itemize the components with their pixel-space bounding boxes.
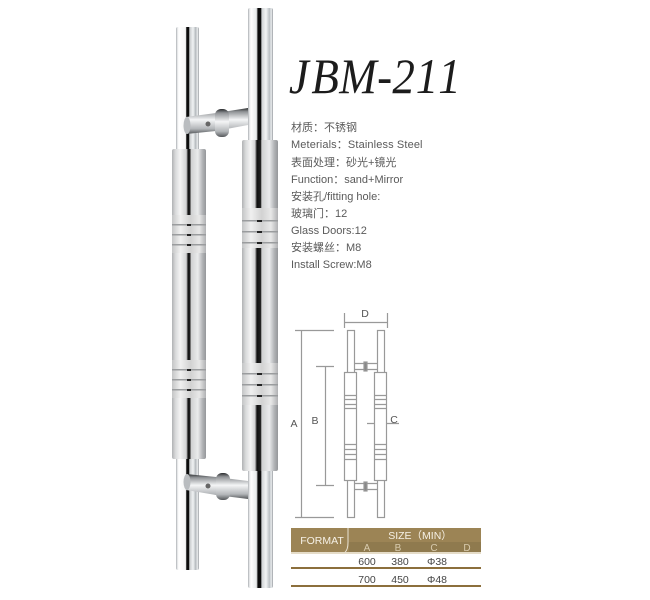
upper standoff arm [184,108,248,137]
table row 600: 600 [358,556,376,568]
dimension B [311,366,334,486]
table row 600: Φ38 [427,556,447,568]
lower standoff arm [184,473,248,500]
table row 700: 450 [391,574,409,586]
dimension A: A [290,418,298,430]
specification text block [291,120,423,271]
specification text block: Install Screw:M8 [291,259,372,271]
left sleeve [172,149,206,459]
dimension A [290,330,334,518]
title: JBM-211 [289,50,461,105]
specification text block: Function：sand+Mirror [291,174,404,186]
table header: C [430,543,438,554]
table header: D [463,543,471,554]
specification text block: Glass Doors:12 [291,225,367,237]
specification text block: 安装螺丝：M8 [291,240,361,254]
specification text block: 安装孔/fitting hole: [291,189,380,203]
icon: door handle photo [172,8,278,588]
right tube [248,8,273,588]
dimension B: B [311,415,319,427]
specification text block: 玻璃门：12 [291,206,347,220]
handle outline [344,330,387,518]
table row 700: 700 [358,574,376,586]
left tube [176,27,199,570]
size table [291,528,481,587]
table header: A [364,543,371,554]
dimension D: D [361,308,369,320]
table row 700 [291,574,481,587]
table header [291,528,481,554]
right sleeve [242,140,278,471]
specification text block: Meterials：Stainless Steel [291,139,423,151]
dimension diagram [290,308,399,518]
dimension C: C [390,414,398,426]
table row 600 [291,556,481,569]
table row 600: 380 [391,556,409,568]
table header: SIZE（MIN） [388,530,452,542]
table row 700: Φ48 [427,574,447,586]
dimension D [344,308,388,328]
table header: FORMAT [300,535,344,547]
table header: B [395,543,402,554]
dimension C [367,414,399,426]
specification text block: 表面处理：砂光+镜光 [291,155,396,169]
specification text block: 材质：不锈钢 [291,120,357,134]
